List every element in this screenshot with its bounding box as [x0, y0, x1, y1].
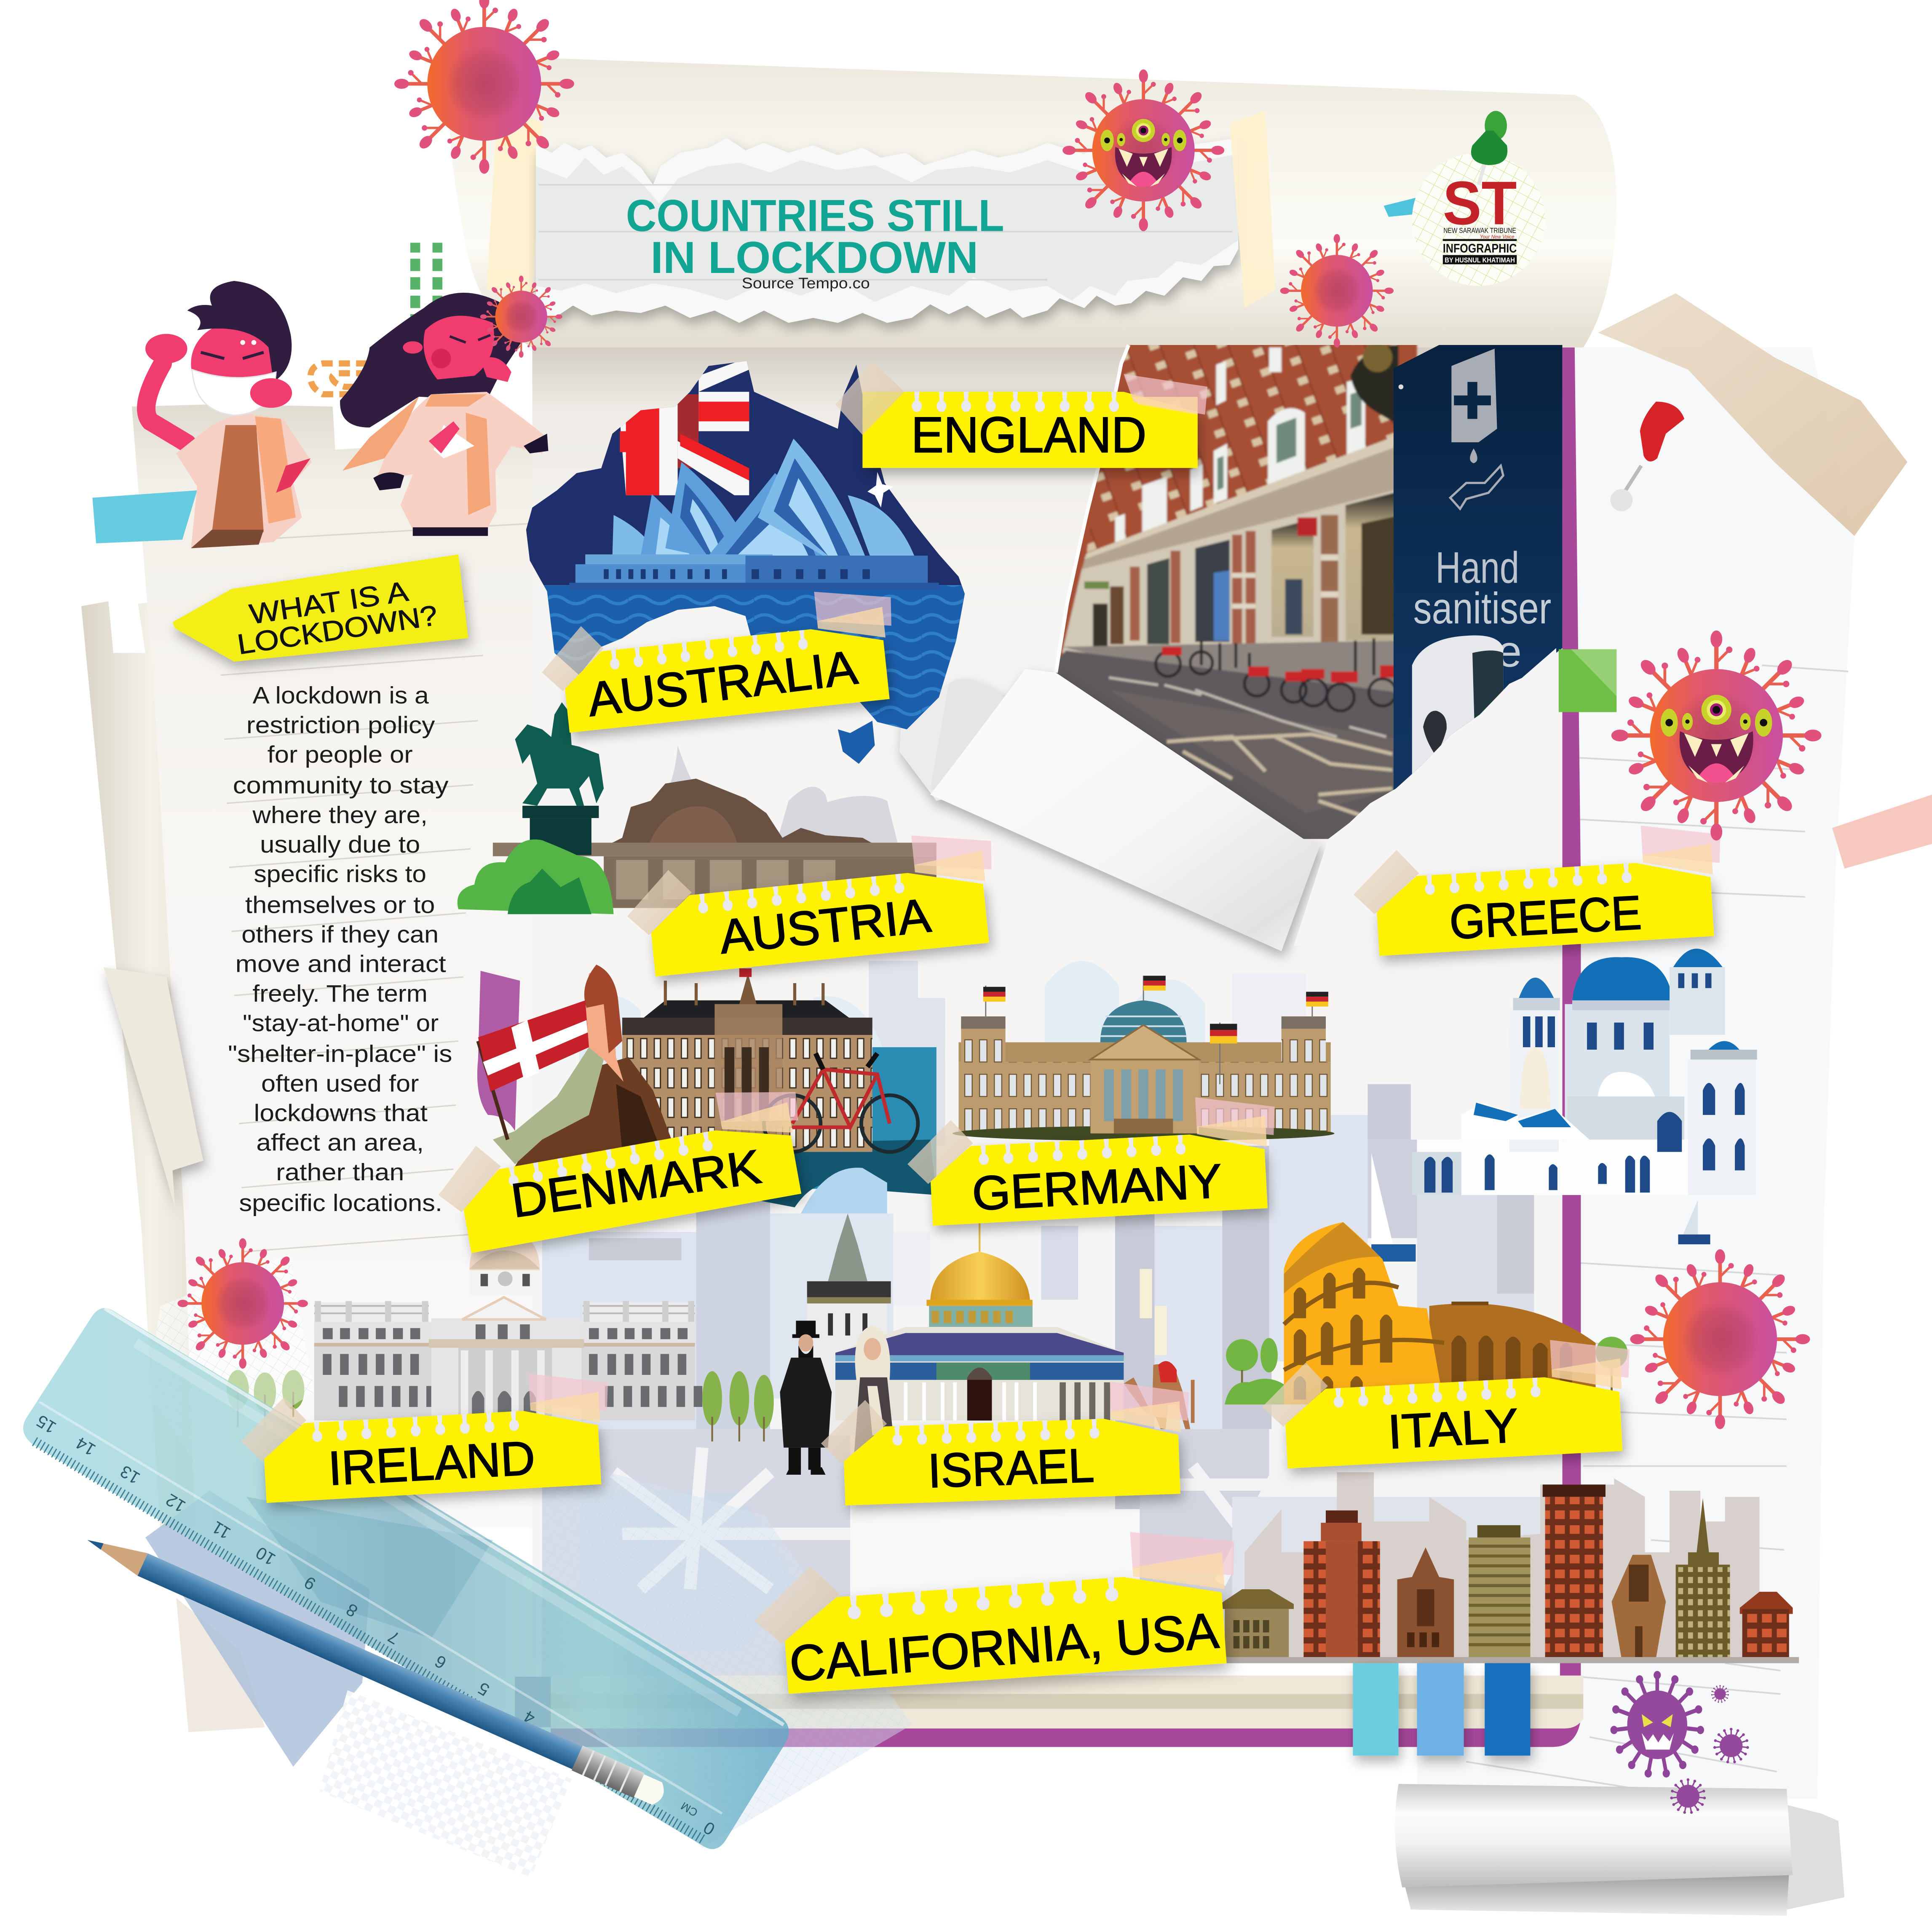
ruler: 13: [117, 1462, 143, 1488]
panel: grid paper sheets beneath ruler: [145, 1254, 912, 1877]
bicycles: [1156, 638, 1396, 711]
cream tape left of banner: [487, 101, 542, 296]
opera house shells: [569, 438, 939, 590]
label: Italy: ITALY: [1386, 1399, 1520, 1459]
hand on mask: [250, 378, 292, 408]
title: [626, 190, 1004, 283]
WHAT IS A LOCKDOWN heading arrow: [172, 554, 468, 662]
brick banded pillars: [1232, 531, 1255, 646]
blue tape left: [92, 490, 197, 543]
illustration: Austria monument: [458, 702, 937, 914]
label: Germany: [905, 1093, 1280, 1227]
icon: monster virus right: [1611, 631, 1822, 840]
panel: main page: [532, 345, 1563, 1663]
label: Australia: [536, 584, 901, 735]
icon: monster virus top: [1062, 70, 1224, 231]
panel: left paper page: [132, 404, 532, 1528]
decorative orange paper clips: [310, 364, 367, 394]
label: England: ENGLAND: [911, 406, 1146, 463]
decorative green paper clip: [415, 243, 437, 326]
wings: [314, 1322, 695, 1347]
bicycle: [764, 1053, 918, 1152]
near wall: [1284, 1222, 1444, 1404]
shop windows: [1346, 492, 1399, 641]
wall soap dispenser: [1412, 635, 1503, 789]
castle: [622, 1035, 872, 1152]
central portico: [1090, 1059, 1199, 1134]
b7: [1676, 1498, 1730, 1658]
icon: tiny purple virus: [1711, 1685, 1729, 1703]
paper curl over photo: [899, 669, 1321, 951]
Tasmania: [838, 721, 875, 764]
decorative curled corner on the left paper: [104, 967, 203, 1207]
equestrian statue: [515, 702, 604, 806]
ruler: 15: [33, 1411, 59, 1438]
panel: street photo of England: [1047, 339, 1563, 862]
pencil: [82, 1528, 668, 1808]
coat: [176, 413, 312, 548]
lockdown definition text block: for people or: [268, 741, 413, 768]
lockdown definition text block: where they are,: [252, 802, 428, 829]
panel: far left torn paper strip: [81, 601, 197, 1528]
brick upper facade: [1087, 339, 1399, 553]
lockdown definition text block: community to stay: [233, 772, 449, 799]
opera house podium: [585, 554, 773, 564]
glass dome: [1100, 1000, 1187, 1042]
title: IN LOCKDOWN: [650, 232, 978, 283]
stone wall: [493, 843, 937, 856]
fascia: [1082, 435, 1399, 569]
icon: green pin: [1471, 111, 1507, 185]
small sailboat: [1683, 1200, 1698, 1235]
green tape: [1559, 649, 1616, 712]
purple tab behind: [477, 971, 520, 1131]
brown rock: [598, 778, 885, 850]
illustration: California skyline with shelf: [1211, 1472, 1799, 1663]
central block: [431, 1318, 581, 1423]
logo badge: NEW SARAWAK TRIBUNE: [1443, 226, 1516, 235]
panel: pale city skyline backdrop: [542, 961, 1565, 1678]
b3: [1397, 1548, 1454, 1658]
lockdown definition text block: lockdowns that: [254, 1100, 428, 1127]
label: Denmark: [429, 1079, 813, 1257]
label: Ireland: IRELAND: [327, 1431, 536, 1495]
illustration: Santorini church of Greece: [1412, 949, 1757, 1244]
b1: [1218, 1589, 1294, 1658]
lockdown definition text block: often used for: [261, 1070, 419, 1097]
WHAT IS A LOCKDOWN heading arrow: WHAT IS A: [247, 575, 410, 631]
woman: [853, 1326, 897, 1472]
panel: purple book cover: [551, 348, 1581, 1747]
b5: [1543, 1484, 1606, 1658]
trees: [227, 1370, 304, 1412]
pale fountain: [665, 746, 899, 850]
body: [376, 392, 547, 530]
navy land: [517, 357, 974, 585]
panel: tan tape top right: [1598, 293, 1908, 536]
panel: beige book pages: [551, 1676, 1583, 1728]
lockdown definition text block: move and interact: [235, 951, 446, 978]
lockdown definition text block: A lockdown is a: [253, 682, 429, 709]
man: [780, 1321, 832, 1475]
photo torn paper edge: [1056, 345, 1129, 673]
sea: [517, 585, 974, 746]
label: Greece: [1351, 821, 1726, 957]
torn white paper: [536, 138, 1238, 323]
b8: [1740, 1592, 1793, 1658]
label: Austria: [622, 828, 1001, 979]
mermaid tail: [493, 1047, 604, 1164]
label: Australia: AUSTRALIA: [585, 641, 860, 727]
ruler: 9: [301, 1572, 319, 1594]
trees: [702, 1371, 774, 1429]
tower and dome: [469, 1263, 541, 1295]
mermaid body: [584, 973, 623, 1082]
camel: [1124, 1361, 1193, 1429]
ruler: CM: [679, 1799, 700, 1819]
title: COUNTRIES STILL: [626, 190, 1004, 241]
wet road: [1047, 650, 1399, 862]
octagon body: [835, 1327, 1124, 1420]
shop clock: [1351, 345, 1399, 425]
logo badge: ST: [1443, 168, 1517, 237]
star: [867, 472, 893, 508]
sticky tabs: [1353, 1663, 1531, 1756]
icon: small purple virus below: [1670, 1778, 1706, 1814]
icon: virus lower left: [177, 1238, 308, 1369]
face: [191, 323, 277, 404]
b2: [1303, 1511, 1380, 1658]
WHAT IS A LOCKDOWN heading arrow: LOCKDOWN?: [235, 599, 440, 660]
pale towers: [1244, 1472, 1760, 1657]
ruler: 0: [700, 1818, 718, 1839]
raised arm: [146, 364, 187, 444]
upper windows: [1115, 348, 1365, 548]
lockdown definition text block: usually due to: [260, 831, 420, 858]
pale hills: [579, 996, 887, 1072]
illustration: Australia map with opera house: [517, 357, 974, 764]
illustration: Denmark castle, mermaid and bicycle: [477, 965, 937, 1214]
back curl: [899, 684, 986, 801]
lockdown definition text block: freely. The term: [253, 980, 428, 1007]
illustration: Reichstag of Germany: [953, 976, 1334, 1141]
label: England: [835, 361, 1207, 468]
lockdown definition text block: specific locations.: [239, 1190, 442, 1216]
ruler: [23, 1308, 789, 1849]
closed eyes and sweat: [201, 353, 264, 358]
lockdown definition text block: rather than: [276, 1159, 404, 1186]
blue tape behind logo: [1383, 196, 1426, 217]
label: Ireland: [238, 1369, 613, 1504]
union flag: [620, 394, 659, 495]
navy sanitiser panel: [1394, 345, 1563, 862]
lockdown definition text block: specific risks to: [254, 861, 426, 888]
shelf: [1211, 1657, 1799, 1663]
panel: street photo of England: e: [1497, 627, 1522, 676]
ruler: 6: [431, 1651, 450, 1673]
panel: torn title banner: [536, 138, 1238, 323]
ruler: 7: [385, 1627, 403, 1648]
far wall: [1429, 1303, 1596, 1404]
ruler: 5: [474, 1679, 493, 1700]
ruler: 14: [72, 1433, 99, 1460]
cream tape right of banner: [1230, 111, 1275, 308]
panel: top paper roll: [450, 58, 1616, 348]
illustration: Italy Colosseum: [1225, 1222, 1628, 1404]
shop level wall: [1062, 489, 1399, 653]
icon: virus by woman: [480, 275, 562, 358]
b6: [1612, 1555, 1666, 1658]
icon: virus near logo: [1280, 234, 1394, 348]
logo badge: Your New Voice: [1480, 234, 1515, 240]
lockdown definition text block: themselves or to: [245, 891, 435, 918]
logo badge: INFOGRAPHIC: [1443, 242, 1517, 256]
logo badge: BY HUSNUL KHATIMAH: [1445, 256, 1515, 264]
golden dome: [930, 1252, 1030, 1301]
lockdown definition text block: others if they can: [241, 921, 439, 948]
pavement: [1062, 641, 1399, 696]
scarf: [425, 394, 487, 406]
icon: virus lower right: [1630, 1249, 1810, 1429]
Danish flag: [478, 1041, 508, 1139]
hand at mouth: [481, 357, 511, 382]
long hair: [340, 293, 524, 428]
blue bridge and water: [801, 1047, 937, 1189]
label: Greece: GREECE: [1448, 886, 1643, 949]
illustration: Ireland government building: [227, 1232, 702, 1427]
panel: pink tape right edge: [1832, 795, 1932, 869]
logo badge: [1383, 153, 1545, 286]
hair: [187, 281, 292, 382]
icon: red pin: [1611, 402, 1684, 511]
lockdown definition text block: [228, 682, 452, 1216]
character: coughing man with mask: [145, 281, 312, 548]
label: Germany: GERMANY: [971, 1154, 1223, 1221]
white chapels: [1461, 1103, 1518, 1139]
source line: Source Tempo.co: [742, 274, 870, 291]
grey banner surface: [536, 154, 1238, 302]
lockdown definition text block: affect an area,: [256, 1129, 424, 1156]
mask: [192, 369, 276, 415]
label: Austria: AUSTRIA: [717, 889, 933, 964]
ruler: 11: [209, 1517, 234, 1543]
icon: small purple virus right: [1713, 1728, 1749, 1764]
trees and bushes: [1226, 1337, 1628, 1372]
mermaid rock: [505, 1057, 672, 1195]
panel: right lined paper: [1417, 348, 1854, 1811]
icon: virus top left: [394, 0, 574, 174]
ruler: 12: [163, 1490, 189, 1516]
face: [423, 315, 494, 380]
label: Israel: [819, 1379, 1193, 1506]
lockdown definition text block: "shelter-in-place" is: [228, 1040, 452, 1067]
corner towers: [961, 1023, 1006, 1096]
label: Denmark: DENMARK: [508, 1140, 764, 1228]
lockdown definition text block: "stay-at-home" or: [243, 1010, 439, 1037]
ruler: 8: [343, 1599, 361, 1621]
label: California USA: CALIFORNIA, USA: [787, 1602, 1220, 1692]
church tower: [807, 1296, 887, 1435]
label: Israel: ISRAEL: [927, 1439, 1095, 1498]
illustration: Israel Dome of the Rock, people and camel: [702, 1214, 1193, 1475]
panel: bottom paper roll: [1395, 1784, 1844, 1916]
cuffs: [373, 434, 549, 490]
ruler: 4: [520, 1707, 538, 1728]
label: Italy: [1260, 1336, 1635, 1470]
character: coughing woman: [340, 293, 549, 536]
panel: street photo of England: Hand: [1435, 543, 1519, 592]
German flags: [983, 976, 1328, 1084]
b4: [1469, 1525, 1531, 1658]
lockdown definition text block: restriction policy: [246, 711, 435, 738]
ruler: 10: [252, 1543, 279, 1569]
green bush: [458, 840, 614, 914]
icon: purple monster virus: [1610, 1671, 1705, 1778]
panel: street photo of England: sanitiser: [1413, 584, 1551, 633]
paper patch below photo: [1294, 648, 1560, 946]
front curl: [930, 669, 1321, 951]
label: California USA: [750, 1525, 1243, 1696]
